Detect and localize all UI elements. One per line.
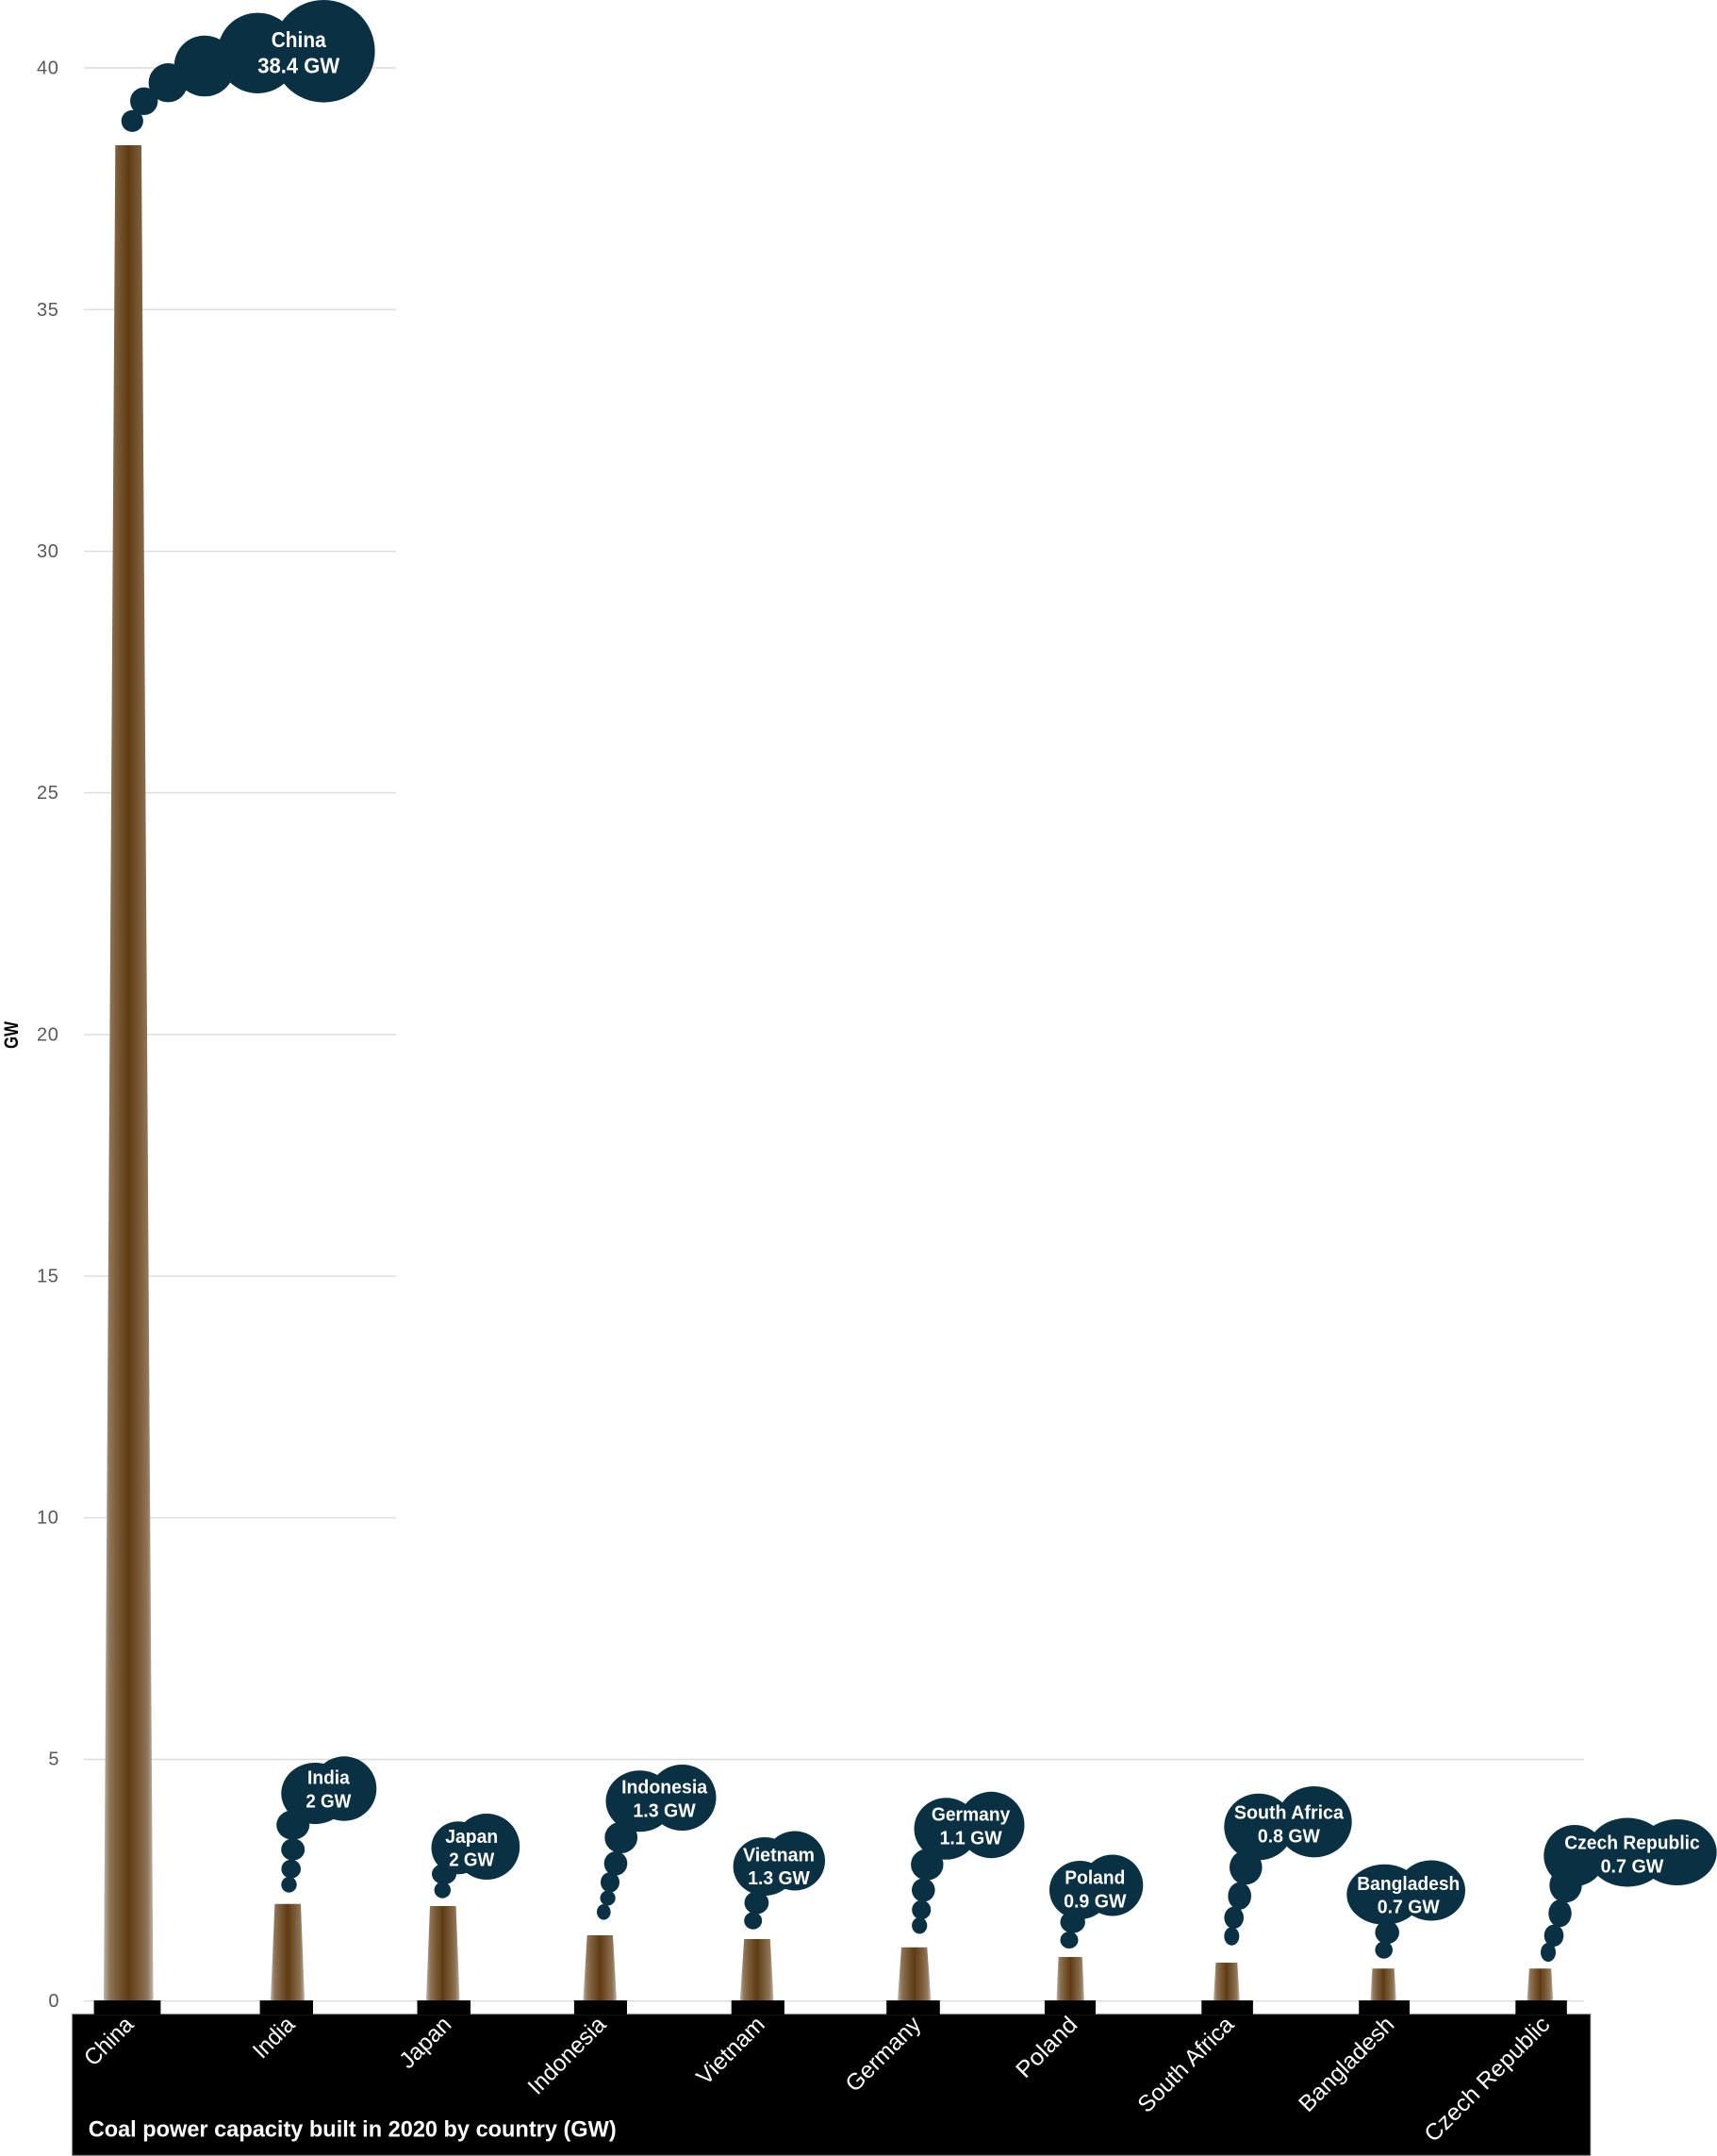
country labels: Czech Republic <box>1420 2012 1555 2148</box>
smoke cloud with value: Japan <box>445 1826 498 1848</box>
chimney stack <box>740 1939 773 2000</box>
smoke cloud with value <box>911 1792 1024 1933</box>
column: South Africa <box>1201 1786 1352 2015</box>
y axis title: GW <box>0 1020 23 1049</box>
chimney base <box>94 2000 160 2015</box>
column: India <box>260 1756 376 2015</box>
panel: black footer with country labels and title <box>73 2012 1591 2155</box>
y axis tick labels: 15 <box>37 1266 58 1286</box>
chimney base <box>732 2000 784 2015</box>
chimney stack <box>1371 1968 1396 2000</box>
chimney base <box>886 2000 940 2015</box>
chimney base <box>260 2000 313 2015</box>
smoke cloud with value <box>276 1756 376 1893</box>
smoke cloud with value: 2 GW <box>449 1849 495 1871</box>
country labels: Indonesia <box>523 2012 611 2099</box>
column: Japan <box>417 1814 520 2015</box>
y axis tick labels: 0 <box>48 1991 58 2012</box>
chimney stack <box>1213 1963 1240 2000</box>
smoke cloud with value: 1.3 GW <box>748 1867 810 1889</box>
y axis tick labels: 40 <box>37 58 58 79</box>
smoke cloud with value: South Africa <box>1234 1802 1344 1824</box>
smoke cloud with value: 1.1 GW <box>940 1828 1002 1849</box>
smoke cloud with value <box>734 1832 825 1930</box>
chimney stack <box>1056 1957 1084 2000</box>
y axis tick labels: 20 <box>37 1024 58 1045</box>
country labels <box>79 2012 1555 2148</box>
chimney stack <box>271 1904 305 2000</box>
y axis tick labels: 5 <box>48 1749 58 1769</box>
smoke cloud with value <box>1049 1854 1143 1949</box>
smoke cloud with value: 38.4 GW <box>257 54 339 78</box>
chimney base <box>1515 2000 1567 2015</box>
grid lines <box>84 68 1584 2001</box>
chimney stack <box>426 1906 460 2000</box>
smoke cloud with value: 0.8 GW <box>1258 1825 1321 1847</box>
country labels: China <box>79 2012 139 2071</box>
country labels: Bangladesh <box>1295 2012 1399 2117</box>
smoke cloud with value: 0.7 GW <box>1378 1897 1440 1918</box>
column: Vietnam <box>732 1832 825 2015</box>
smoke cloud with value: 0.7 GW <box>1601 1855 1664 1877</box>
smoke cloud with value: 2 GW <box>305 1791 352 1813</box>
column: Bangladesh <box>1346 1860 1465 2015</box>
country labels: Poland <box>1012 2012 1082 2083</box>
country labels: India <box>248 2012 300 2064</box>
y axis tick labels: 30 <box>37 541 58 562</box>
chimney base <box>417 2000 471 2015</box>
country labels: Germany <box>841 2012 927 2098</box>
country labels: South Africa <box>1133 2012 1240 2118</box>
footer title: Coal power capacity built in 2020 by country (GW) <box>89 2116 617 2143</box>
chimney base <box>1359 2000 1410 2015</box>
y axis tick labels: 35 <box>37 300 58 321</box>
chimney base <box>1045 2000 1096 2015</box>
y axis tick labels: 10 <box>37 1507 58 1528</box>
smoke cloud with value <box>1224 1786 1352 1946</box>
smoke cloud with value: 0.9 GW <box>1064 1891 1127 1913</box>
y axis tick labels <box>37 58 58 2012</box>
chimney base <box>1201 2000 1253 2015</box>
y axis tick labels: 25 <box>37 783 58 804</box>
country labels: Japan <box>394 2012 456 2074</box>
smoke cloud with value: Poland <box>1065 1867 1125 1889</box>
chimney base <box>574 2000 627 2015</box>
chimney stack <box>898 1948 931 2000</box>
smoke cloud with value: Vietnam <box>743 1844 815 1866</box>
country labels: Vietnam <box>692 2012 770 2090</box>
smoke cloud with value: Bangladesh <box>1357 1873 1460 1895</box>
smoke cloud with value: Germany <box>932 1804 1011 1826</box>
column: Indonesia <box>574 1765 717 2015</box>
smoke cloud with value <box>432 1814 520 1899</box>
smoke cloud with value <box>1541 1818 1717 1962</box>
smoke cloud with value: China <box>272 27 326 52</box>
smoke cloud with value: Indonesia <box>621 1777 708 1799</box>
smoke cloud with value: India <box>307 1767 350 1789</box>
column: Germany <box>886 1792 1024 2015</box>
smoke cloud with value <box>122 0 375 132</box>
chimney stack <box>583 1935 617 2000</box>
smoke cloud with value <box>1346 1860 1465 1959</box>
smoke cloud with value: 1.3 GW <box>633 1800 696 1822</box>
column: Czech Republic <box>1515 1818 1717 2015</box>
chimney stack <box>104 145 153 2000</box>
column: China <box>94 0 375 2015</box>
chimney stack <box>1527 1968 1553 2000</box>
column: Poland <box>1045 1854 1143 2015</box>
smoke cloud with value <box>597 1765 717 1920</box>
smoke cloud with value: Czech Republic <box>1564 1833 1700 1854</box>
